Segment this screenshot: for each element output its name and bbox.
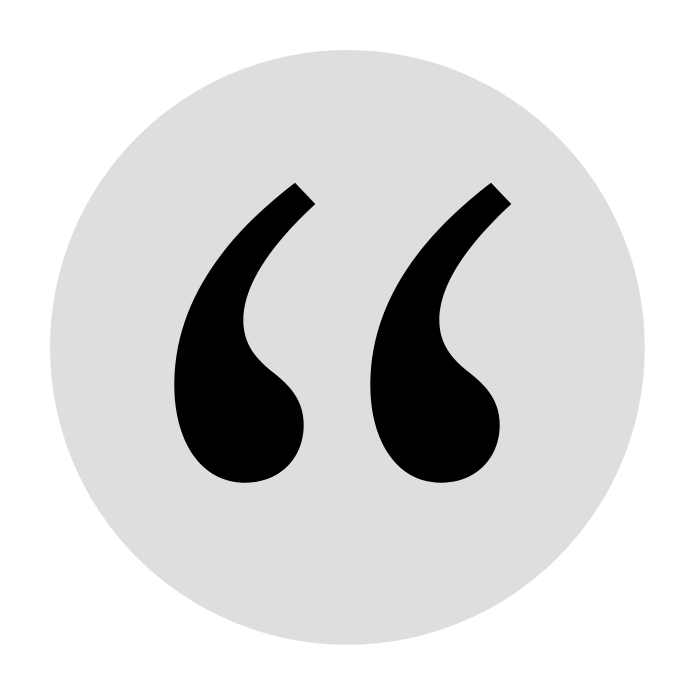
grey circle background — [50, 50, 645, 645]
icon: right quote mark — [370, 183, 511, 483]
icon: left quote mark — [174, 183, 315, 483]
icon: opening double quotation marks — [174, 183, 511, 483]
